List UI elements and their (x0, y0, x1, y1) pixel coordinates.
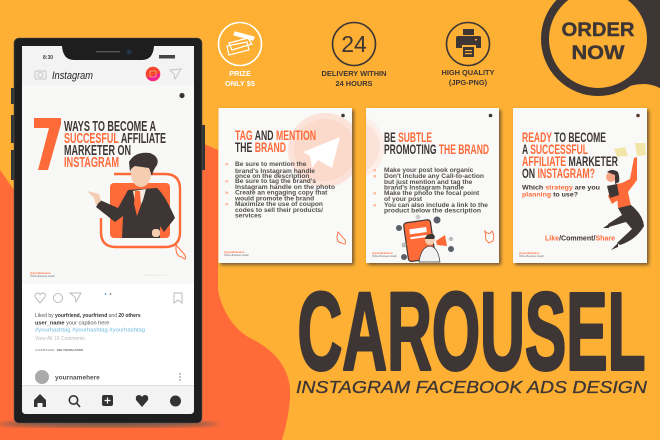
post actions (35, 293, 182, 303)
phone (11, 38, 205, 423)
red wave shape (0, 143, 290, 440)
feature: delivery: 24 (341, 31, 367, 57)
side buttons (11, 88, 205, 180)
card 1 bullets: Create an engaging copy that (235, 190, 328, 196)
card 1 title (235, 127, 316, 155)
card 1 bullets: Maximize the use of coupon (235, 201, 323, 208)
card 1 bullets: » (225, 162, 229, 168)
card 1 bullets: services (235, 212, 262, 220)
card 2: Online Business Coach (372, 255, 398, 258)
man illustration (87, 153, 180, 247)
bottom nav (22, 385, 194, 414)
caption text: Liked by yourfriend, yourfriend and 20 others (35, 313, 141, 319)
card 2 bullets: You can also include a link to the (384, 202, 488, 209)
post image (22, 85, 194, 284)
comment row: yournamehere (55, 374, 100, 382)
card 1 bullets: Be sure to mention the (235, 161, 307, 168)
post title (64, 119, 166, 171)
card 3 title (522, 129, 618, 181)
post title: SUCCESFUL AFFILIATE (64, 131, 166, 147)
icon: hand (337, 232, 346, 244)
phone shadow (0, 421, 218, 427)
card 2 title (384, 129, 489, 157)
card 3 title: A SUCCESSFUL (522, 141, 588, 157)
card 2 bullets: product below the description (384, 208, 481, 214)
card 1 bullets: » (225, 179, 229, 185)
card 1 title: THE BRAND (235, 139, 286, 155)
card 3 question (522, 184, 600, 198)
card 2 bullets: of your post (384, 196, 423, 203)
caption text: View All 10 Comments (35, 336, 85, 342)
caption text: #yourhashtag #yourhashtag #yourhashtag (35, 328, 145, 334)
card 1 bullets: once on the description (235, 173, 309, 180)
card 3 title: ON INSTAGRAM? (522, 165, 595, 181)
feature: delivery: DELIVERY WITHIN (322, 69, 386, 78)
post footer: @yourbrand.co (30, 271, 51, 275)
caption text: user_name your caption here (35, 320, 109, 326)
card 1 bullets: codes to sell their products/ (235, 207, 323, 214)
top bar (22, 46, 194, 85)
card 1 bullets: would promote the brand (234, 196, 314, 202)
card 1 bullets: » (225, 202, 229, 208)
post title: INSTAGRAM (64, 155, 119, 171)
card 3 title: AFFILIATE MARKETER (522, 153, 618, 169)
feature: delivery (322, 22, 386, 88)
order now badge: NOW (572, 42, 625, 64)
card 1 bullets: Be sure to tag the brand's (235, 178, 316, 185)
big seven (34, 118, 61, 170)
card 1: Online Business Coach (224, 254, 250, 257)
avatar (146, 67, 160, 81)
icon: send (170, 69, 181, 79)
icon: hand (176, 245, 186, 259)
card 2 bullets: » (373, 203, 377, 209)
instagram logo: Instagram (52, 70, 93, 82)
post image: Online Business Coach (30, 275, 56, 278)
circle watermark (366, 118, 384, 176)
card 2 footer: @yourbrand.co (372, 251, 393, 255)
card 2 bullets: but just mention and tag the (384, 179, 473, 186)
caption text: 2 HOURS AGO · SEE TRANSLATION (35, 348, 83, 352)
card 2 bullets: brand's Instagram handle (384, 184, 464, 192)
card 3 question: Which strategy are you (522, 184, 600, 192)
order now badge: ORDER (562, 19, 634, 41)
card 2 bullets: Make your post look organic (384, 167, 474, 174)
card 1 bullets (225, 161, 335, 220)
post title: MARKETER ON (64, 143, 131, 159)
feature: quality (442, 22, 495, 87)
card 2 bullets: Make the photo the focal point (384, 190, 480, 197)
feature: price (218, 22, 262, 88)
card 1 bullets: Instagram handle on the photo (235, 184, 335, 191)
card 1 (218, 108, 362, 265)
card 1 bullets: brand's Instagram handle (235, 168, 315, 175)
card 1 title: TAG AND MENTION (235, 127, 316, 143)
icon: hand (485, 231, 494, 243)
card 3 question: planning to use? (522, 192, 578, 198)
icon: cards (227, 32, 254, 55)
post title: WAYS TO BECOME A (64, 119, 156, 135)
icon: camera (35, 71, 46, 79)
card 2 bullets: Don't include any Call-to-action (384, 173, 484, 180)
feature: quality: (JPG-PNG) (449, 78, 488, 87)
post image: Follow yourbrand (145, 273, 167, 277)
card 2 bullets: » (373, 174, 377, 180)
card 2 bullets: » (373, 191, 377, 197)
comment row (35, 370, 181, 384)
card 3: Online Business Coach (519, 255, 545, 258)
icon: printer (456, 29, 481, 57)
card 1 bullets: » (225, 190, 229, 196)
card 2 bullets (373, 167, 488, 214)
card 2 bullets: » (373, 168, 377, 174)
card 3 (513, 108, 649, 265)
feature: delivery: 24 HOURS (336, 79, 373, 88)
card 2 title: BE SUBTLE (384, 129, 432, 145)
telegram watermark (288, 113, 352, 187)
feature: quality: HIGH QUALITY (442, 68, 495, 77)
feature: price: ONLY $5 (225, 79, 255, 88)
card 3 footer: @yourbrand.co (519, 251, 540, 255)
card 2 (366, 108, 504, 268)
caption text (35, 313, 145, 352)
order now badge (545, 0, 660, 92)
notch (62, 46, 154, 60)
woman illustration (603, 143, 646, 250)
status bar: 8:30 (43, 55, 53, 61)
card 3 title: READY TO BECOME (522, 129, 606, 145)
card 2 title: PROMOTING THE BRAND (384, 141, 489, 157)
card 1 footer: @yourbrand.co (224, 250, 245, 254)
call to action: Like/Comment/Share (545, 234, 615, 242)
feature: price: PRIZE (229, 69, 251, 78)
megaphone illustration (396, 215, 454, 262)
subheading: INSTAGRAM FACEBOOK ADS DESIGN (296, 377, 647, 397)
